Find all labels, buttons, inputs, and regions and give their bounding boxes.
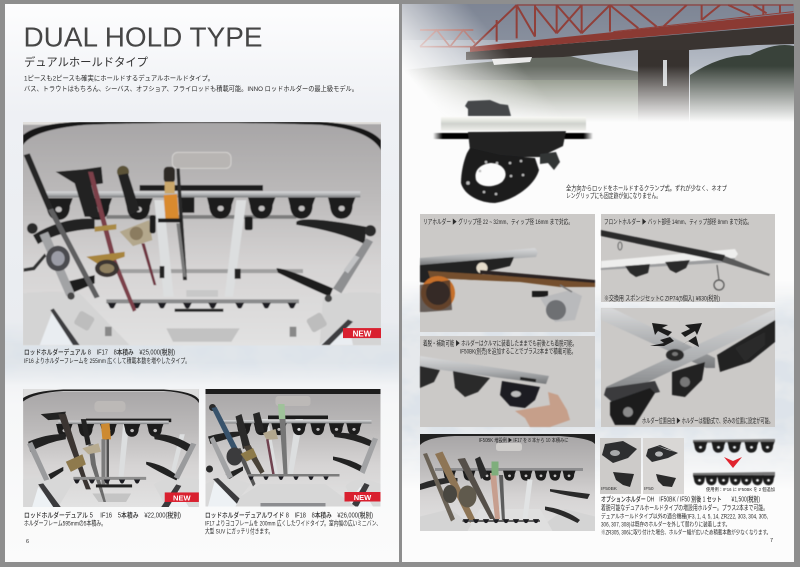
NEW badge [165,492,199,502]
rear holder photo [420,248,595,322]
caption: dual 5: ロッドホルダーデュアル 5 IF16 5本積み ¥22,000(税別) [24,510,181,520]
deck underside [466,25,794,60]
caption: dual 8: ロッドホルダーデュアル 8 IF17 8本積み ¥25,000(税別) [24,348,175,356]
panel: right page [402,4,794,562]
side arms [296,219,366,244]
caption: dual 8: IF16 よりホルダーフレームを 255mm 広くして積載本数を増やしたタイプ。 [24,356,190,365]
caption: dual 5: ホルダーフレーム595mmの5本積み。 [24,518,106,528]
front holder photo [601,230,770,290]
dome light [172,152,231,168]
option holder text: 306, 307, 308)は既存のホルダーを外して替わりに装着します。 [601,520,730,528]
caption: dual 8 [24,348,190,365]
caption: dual wide 8: ロッドホルダーデュアルワイド 8 IF18 8本積み ¥26,000(税別) [205,510,373,520]
photo caption: IF50BK 増設例 ▶ IF17 を 8 本から 10 本積みに [479,436,568,444]
vertical struts [154,200,174,297]
illustration: before and after holder rows: 使用例：IF16 に IF50BK を 2 個追加 [706,486,775,493]
photo: dual 8 rod holder in car [23,122,381,346]
NEW badge: NEW [354,493,372,502]
seven holder row [693,472,775,485]
tile: IF50: IF50 [644,486,654,492]
panel: left page [5,4,399,562]
tile: IF50BK: IF50BK [601,486,618,492]
subtitle: デュアルホールドタイプ [24,55,149,69]
clamp description: 全方向からロッドをホールドするクランプ式。ずれが少なく、ネオプ [566,184,727,192]
panel: removable holder [420,336,595,427]
panel: rear holder [420,214,595,332]
title: DUAL HOLD TYPE [24,22,262,52]
panel: removable holder: 着脱・補助可能 ▶ ホルダーはクルマに装着したままでも前後とも着脱可能。 [423,338,577,348]
snow background right page [402,292,794,472]
icon: movement arrows [650,323,702,347]
photo: dual 5 rod holder [23,389,199,507]
photo: red bridge fading into fog [402,4,794,130]
lower mid rail [120,269,303,273]
photo: dual wide 8 rod holder [206,389,380,506]
intro text: バス、トラウトはもちろん、シーバス、オフショア、フライロッドも積載可能。INNO ロッドホルダーの最上級モデル。 [24,84,358,93]
trees [690,45,794,120]
lower rail [106,299,299,303]
clamp description [566,184,727,200]
reel [120,220,152,246]
upper holders [45,198,73,220]
panel: removable holder: IF50BK(別売)を追加することでプラス2本まで積載可能。 [460,346,576,356]
intro text [24,74,358,93]
caption: dual wide 8: 大型 SUV にガッチリ付きます。 [205,526,273,536]
NEW badge: NEW [353,329,372,338]
far bridge [420,30,475,47]
sliding rails photo [601,308,775,425]
NEW badge [344,492,380,502]
illustration: before and after holder rows [693,439,775,493]
upper rail [44,191,360,197]
page number 7: 7 [770,538,773,544]
panel: sliding holder [601,308,775,427]
caption: dual wide 8: IF17 よりヨコフレームを 200mm 広くしたワイドタイプ。室内幅の広いミニバン、 [205,518,381,528]
top bar [140,185,263,191]
tile: IF50 [643,438,684,494]
pier [638,50,689,120]
intro text: 1ピースも2ピースも確実にホールドするデュアルホールドタイプ。 [24,74,214,82]
snow background left page [5,339,399,376]
option holder text [601,494,771,536]
NEW badge: NEW [173,493,191,502]
five holder row [693,439,775,453]
panel: rear holder: リアホルダー ▶ グリップ径 22 ~ 32mm、ティップ径 16mm まで対応。 [423,217,573,226]
caption: dual wide 8 [205,510,381,536]
product: clamp holder detail [433,100,593,203]
chrome struts [333,238,373,293]
photo: IF50BK expansion example [420,434,595,531]
panel: front holder [601,214,775,302]
holder with hand photo [420,356,570,427]
page number 6: 6 [26,539,29,545]
clamp description: レングリップにも固定跡が気になりません。 [566,191,661,200]
hills and field [412,56,638,80]
trusses [472,5,793,48]
caption: dual 5 [24,510,181,528]
rods [24,153,53,212]
icon: red arrow [724,457,742,468]
NEW badge [343,328,381,338]
tile: IF50BK [600,438,641,494]
main deck [470,13,794,52]
panel: front holder: ※交換用 スポンジセットC ZIP74(5個入) ¥630(税別) [604,294,720,302]
